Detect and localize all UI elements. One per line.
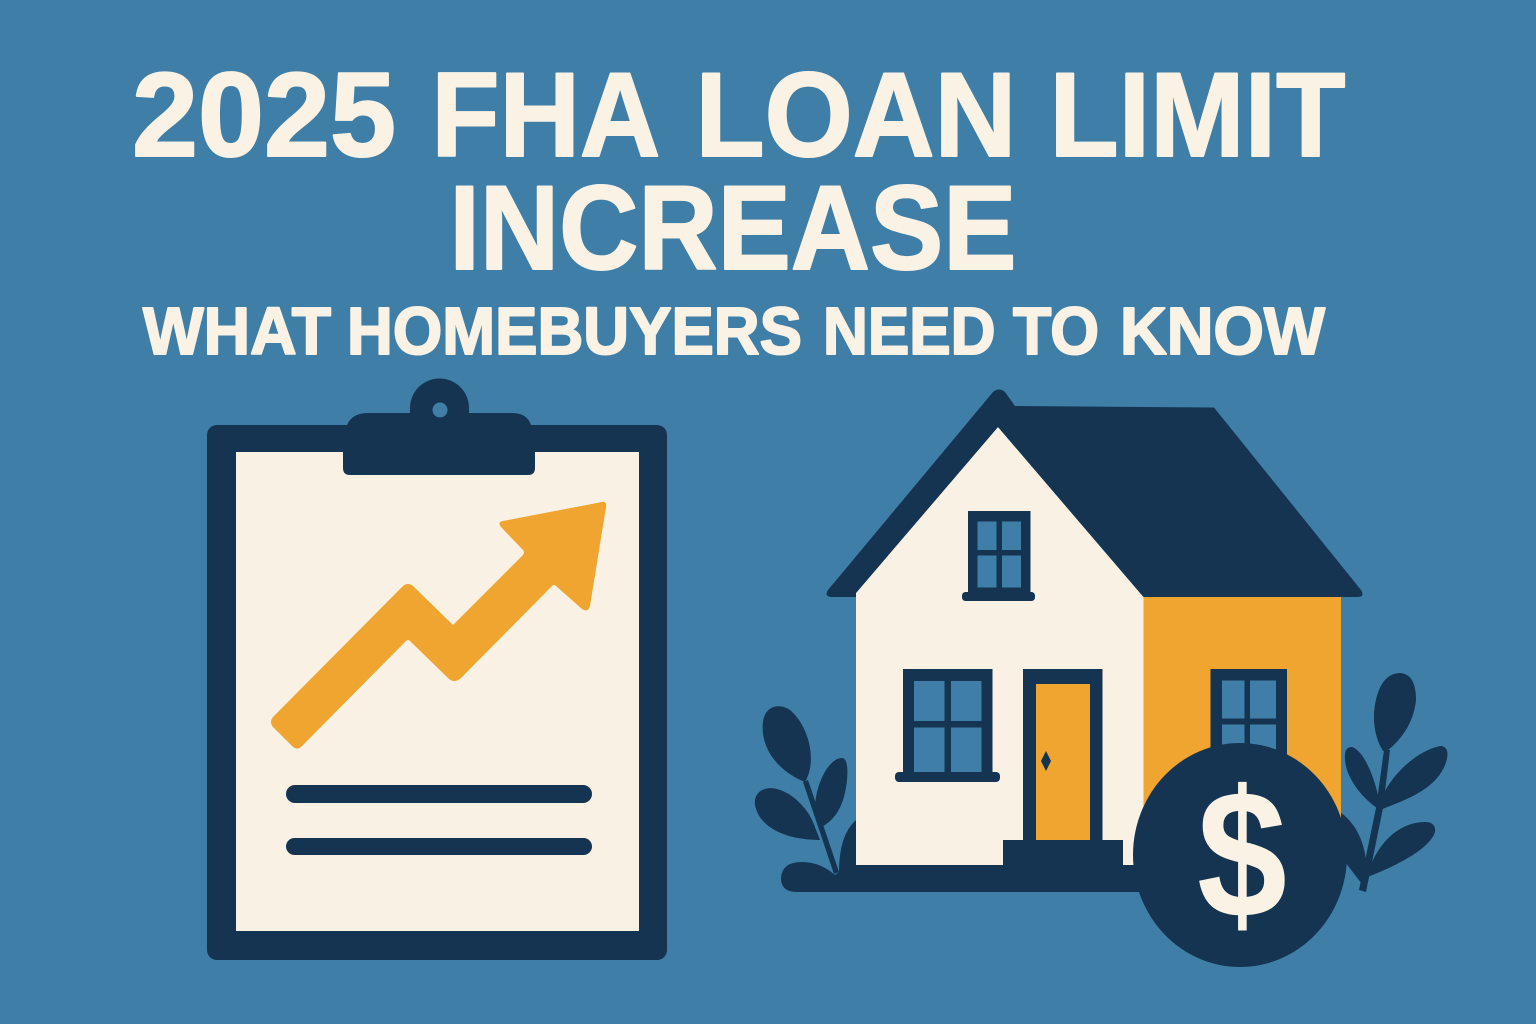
- ground: [781, 820, 1180, 892]
- right plant: [1340, 673, 1447, 892]
- paper sheet: [236, 452, 639, 931]
- title: [132, 48, 1345, 295]
- title: 2025: [132, 48, 396, 182]
- dollar coin: $: [1197, 752, 1287, 956]
- subtitle: TO: [1013, 294, 1099, 369]
- subtitle: [143, 294, 1326, 369]
- title: FHA: [431, 48, 660, 182]
- right window: [1210, 669, 1287, 759]
- subtitle: WHAT: [143, 294, 331, 369]
- rising arrow: [271, 502, 606, 748]
- icon: house with plants and dollar coin: [755, 390, 1447, 967]
- subtitle: KNOW: [1120, 294, 1326, 369]
- yellow side wall: [1143, 590, 1341, 866]
- door: [1003, 669, 1123, 868]
- subtitle: HOMEBUYERS: [347, 294, 802, 369]
- text line 2: [286, 838, 592, 855]
- roof: [827, 390, 1362, 597]
- cream front wall: [856, 427, 1144, 865]
- title: LIMIT: [1049, 48, 1345, 182]
- title: INCREASE: [449, 161, 1016, 295]
- attic window: [962, 511, 1035, 601]
- left window: [895, 669, 1000, 782]
- subtitle: NEED: [823, 294, 996, 369]
- left plant: [755, 706, 847, 874]
- title: LOAN: [695, 48, 1016, 182]
- dollar coin: [1133, 743, 1347, 967]
- clip hole: [432, 402, 448, 418]
- text line 1: [286, 785, 592, 803]
- clipboard clip: [343, 378, 535, 475]
- clipboard board: [207, 425, 667, 960]
- icon: clipboard with rising chart: [207, 378, 667, 960]
